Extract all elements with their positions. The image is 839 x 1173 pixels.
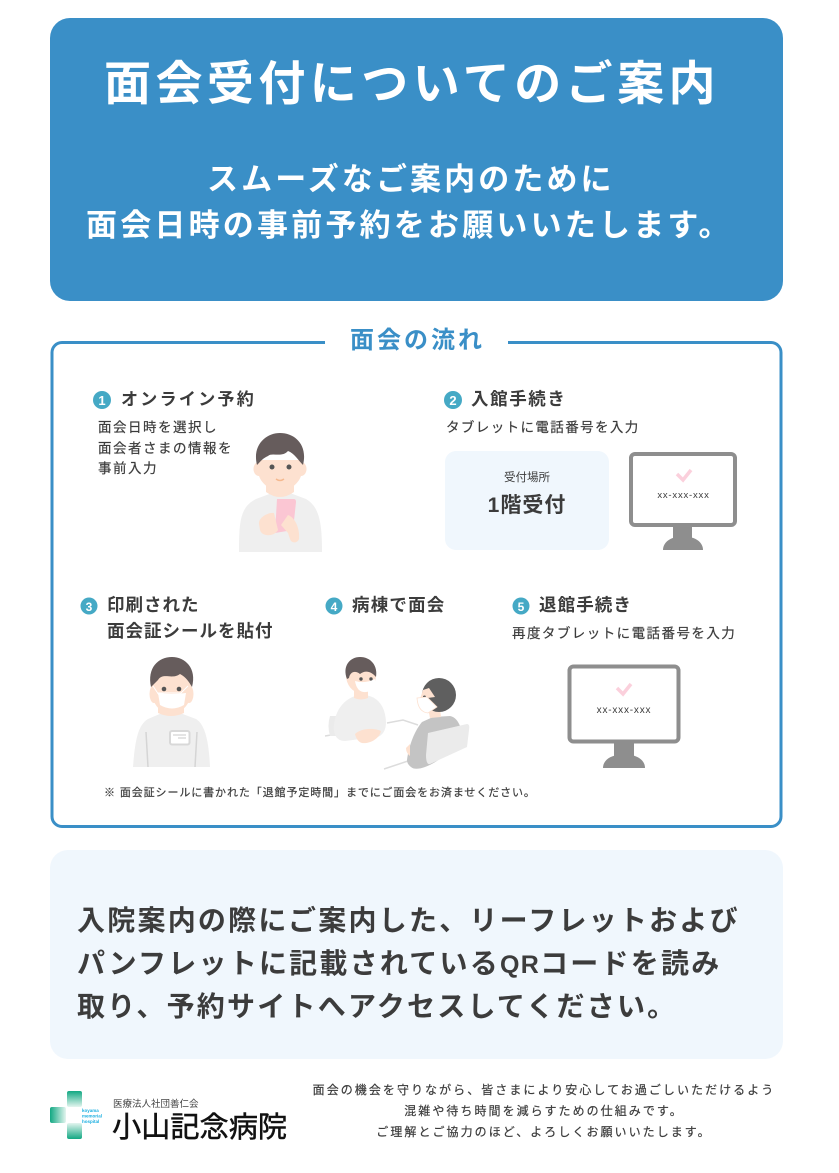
step 2 heading: 入館手続き — [471, 389, 566, 409]
icon: masked person with visitor badge — [133, 657, 210, 767]
step 1 description — [98, 420, 233, 476]
step 1 description: 面会者さまの情報を — [98, 441, 233, 456]
logo small English text: hospital — [82, 1119, 99, 1124]
note: ※ 面会証シールに書かれた「退館予定時間」までにご面会をお済ませください。 — [104, 785, 536, 799]
subtitle: スムーズなご案内のために — [207, 162, 615, 197]
panel: QR code instructions: 入院案内の際にご案内した、リーフレットおよび — [77, 904, 740, 936]
reception card: 受付場所 — [504, 470, 550, 484]
icon: person using smartphone — [239, 433, 322, 552]
step 5 heading: 退館手続き — [539, 595, 632, 615]
step 1 number badge: 1 — [98, 393, 106, 408]
logo small English text: memorial — [82, 1114, 102, 1118]
step 2 number badge: 2 — [449, 393, 457, 408]
step 2 — [444, 389, 735, 550]
panel: QR code instructions: 取り、予約サイトへアクセスしてください。 — [77, 991, 677, 1022]
step 3 number badge: 3 — [86, 600, 93, 614]
reception card — [445, 451, 609, 550]
panel: QR code instructions — [50, 850, 783, 1059]
step 5 description: 再度タブレットに電話番号を入力 — [512, 625, 736, 641]
step 3 heading: 印刷された — [107, 595, 200, 615]
logo hospital name: 小山記念病院 — [112, 1112, 287, 1144]
footer message: 混雑や待ち時間を減らすための仕組みです。 — [404, 1103, 684, 1118]
icon: two people meeting at a table — [325, 657, 469, 769]
subtitle — [86, 162, 733, 243]
step 1 description: 事前入力 — [98, 460, 158, 476]
step 5 — [512, 595, 736, 768]
icon: tablet monitor — [631, 454, 735, 550]
step 1 — [93, 390, 322, 552]
step 5 number badge: 5 — [518, 600, 525, 614]
step 3 heading — [107, 595, 274, 641]
heading: flow: 面会の流れ — [350, 327, 485, 354]
step 2 description: タブレットに電話番号を入力 — [446, 419, 640, 435]
logo small English text: koyama — [82, 1108, 99, 1113]
panel: QR code instructions: パンフレットに記載されているQRコードを読み — [77, 948, 721, 979]
step 1 description: 面会日時を選択し — [98, 420, 218, 435]
logo corporation name: 医療法人社団善仁会 — [113, 1098, 199, 1110]
title: 面会受付についてのご案内 — [104, 57, 720, 110]
footer message: 面会の機会を守りながら、皆さまにより安心してお過ごしいただけるよう — [313, 1082, 775, 1097]
logo: Koyama Memorial Hospital — [50, 1091, 287, 1144]
reception card: 1階受付 — [488, 494, 566, 517]
step 4 number badge: 4 — [331, 600, 338, 614]
step 4 — [325, 595, 469, 769]
step 5 number badge — [512, 598, 530, 614]
step 3 number badge — [80, 598, 98, 614]
step 4 heading: 病棟で面会 — [352, 595, 446, 615]
logo cross mark — [50, 1091, 82, 1139]
icon: tablet monitor: xx-xxx-xxx — [597, 705, 651, 716]
subtitle: 面会日時の事前予約をお願いいたします。 — [86, 208, 733, 243]
panel: flow of visit — [52, 327, 781, 826]
step 2 number badge — [444, 391, 462, 409]
step 3 — [80, 595, 274, 767]
footer message: ご理解とご協力のほど、よろしくお願いいたします。 — [376, 1124, 712, 1139]
icon: tablet monitor — [570, 666, 678, 768]
step 4 number badge — [326, 598, 342, 614]
step 1 heading: オンライン予約 — [121, 390, 256, 409]
step 1 number badge — [93, 391, 111, 409]
step 3 heading: 面会証シールを貼付 — [107, 621, 274, 641]
header panel — [50, 18, 783, 301]
icon: tablet monitor: xx-xxx-xxx — [657, 490, 710, 501]
footer message — [313, 1082, 775, 1139]
logo small English text — [82, 1108, 102, 1124]
